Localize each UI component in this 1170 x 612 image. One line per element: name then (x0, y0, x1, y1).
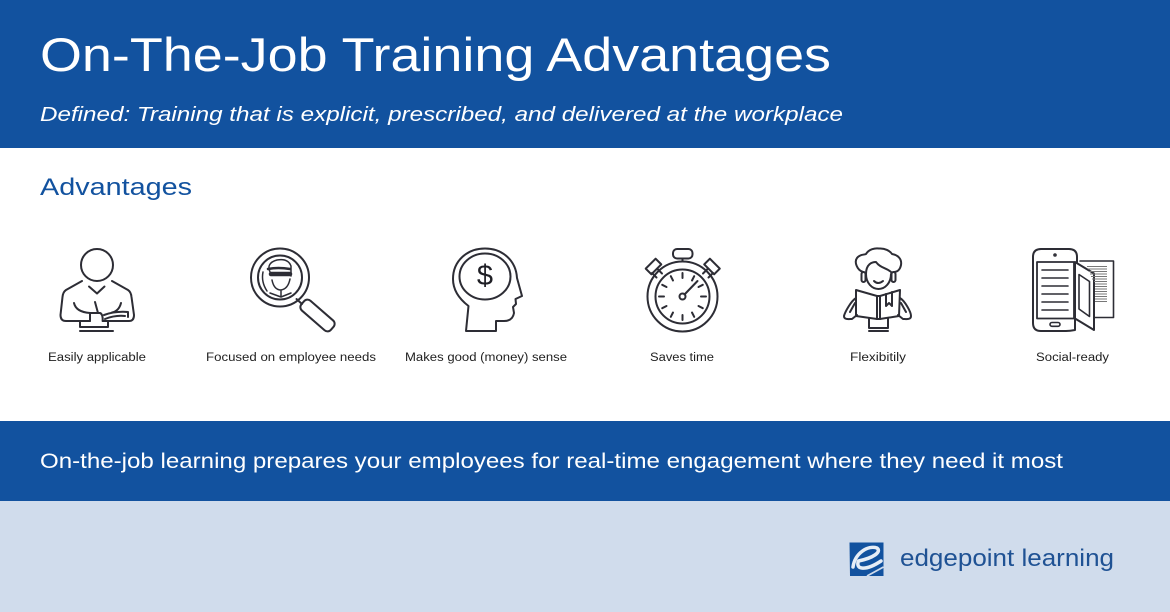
logo mark (850, 542, 884, 576)
icon: girl reading a book (844, 248, 911, 331)
subtitle: Defined: Training that is explicit, prescribed, and delivered at the workplace (40, 103, 843, 126)
callout band (0, 421, 1170, 501)
label: saves time: Saves time (650, 352, 714, 364)
section heading: advantages: Advantages (40, 174, 192, 201)
icon: person writing at desk (60, 249, 134, 331)
label: focused on employee needs: Focused on employee needs (206, 352, 376, 364)
header panel (0, 0, 1170, 148)
icon: magnifier over employee (251, 248, 336, 333)
icon: phone with opening page (1033, 249, 1114, 331)
label: social-ready: Social-ready (1036, 352, 1109, 364)
logo wordmark: edgepoint learning (900, 545, 1114, 572)
icon: head with dollar sign (453, 248, 522, 331)
footer panel (0, 501, 1170, 612)
callout text: On-the-job learning prepares your employees for real-time engagement where they need it most (40, 450, 1063, 473)
label: flexibility: Flexibitily (850, 352, 906, 364)
title: On-The-Job Training Advantages (40, 29, 831, 82)
label: makes good money sense: Makes good (money) sense (405, 352, 567, 364)
icon: stopwatch (646, 249, 720, 332)
label: easily applicable: Easily applicable (48, 352, 146, 364)
icon: head with dollar sign: $ (477, 260, 493, 292)
